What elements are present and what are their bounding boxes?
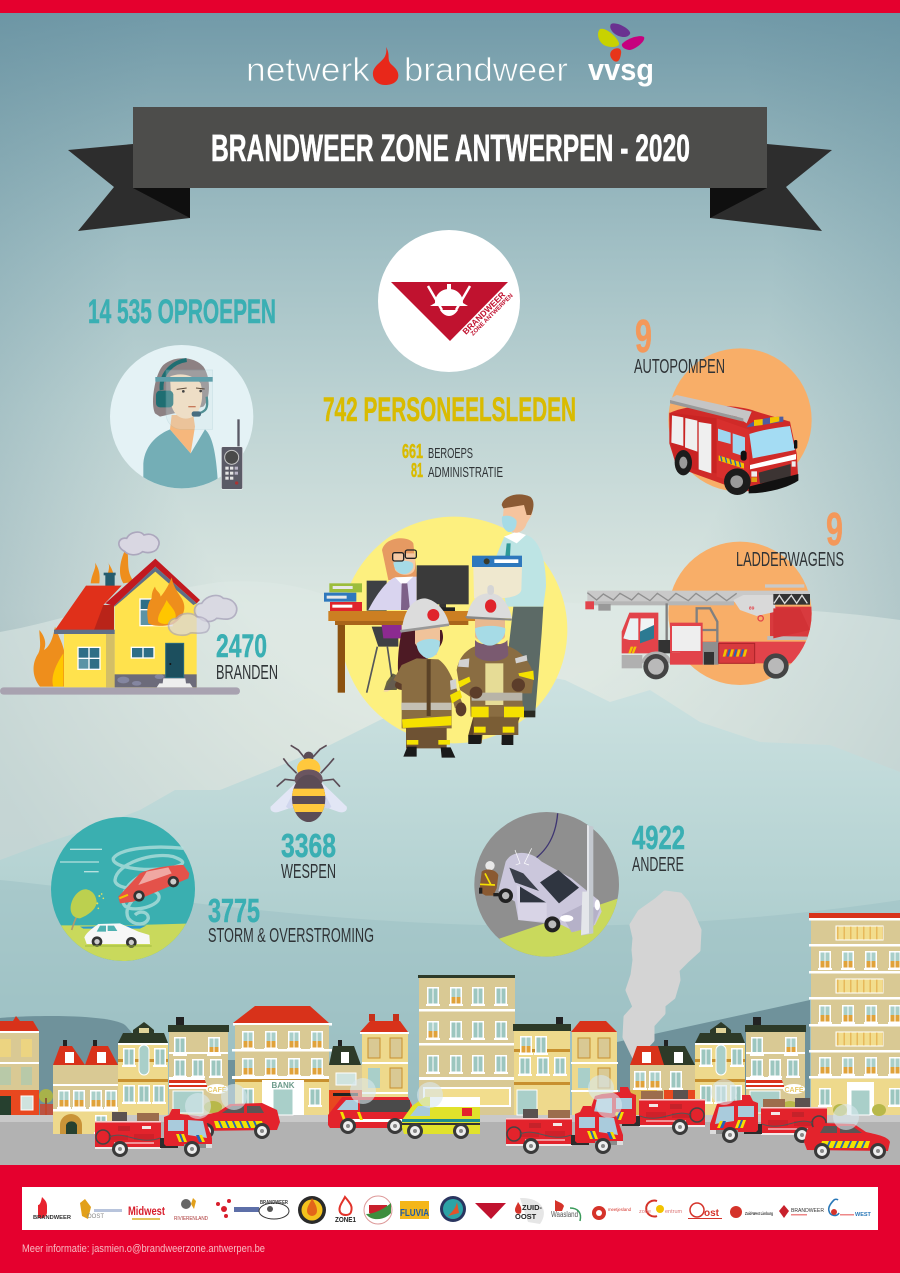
logo: netwerk brandweer xyxy=(246,47,568,88)
zone logo in white circle: BRANDWEER xyxy=(460,290,507,336)
icon: bee xyxy=(270,745,347,823)
firefighter right xyxy=(457,585,534,745)
logo: west xyxy=(829,1199,872,1218)
zone logo in white circle xyxy=(378,230,520,372)
building row left: BANK xyxy=(271,1081,295,1090)
illustration: dispatcher with radio xyxy=(110,345,253,490)
logo: zuid-west limburg xyxy=(730,1206,773,1218)
stat: branden: 2470 xyxy=(216,628,267,664)
logo: zuid-west limburg: Zuid-West Limburg xyxy=(745,1211,773,1216)
logo: fluvia xyxy=(400,1201,429,1219)
logo: west: WEST xyxy=(855,1212,872,1218)
logo: oost: ost xyxy=(704,1208,720,1219)
personnel breakdown: BEROEPS xyxy=(428,445,473,462)
illustration: ladder truck on orange circle: 89 xyxy=(749,605,755,611)
skyline: distant hills xyxy=(0,1000,810,1115)
smoke column xyxy=(625,893,699,1058)
street with buildings and vehicles xyxy=(0,913,900,1165)
logo: vvsg: vvsg xyxy=(588,52,654,87)
vehicle: fire engine left xyxy=(95,1109,212,1157)
stat: storm en overstroming: 3775 xyxy=(208,892,260,929)
logo: brandweer fort xyxy=(259,1200,289,1219)
top red bar xyxy=(0,0,900,13)
firefighter left xyxy=(383,598,466,758)
logo: netwerk brandweer: brandweer xyxy=(404,51,568,88)
logo: zone 1 xyxy=(335,1197,356,1224)
illustration: ladder truck on orange circle xyxy=(585,542,813,685)
logo: brandweer fort: BRANDWEER xyxy=(260,1200,288,1206)
stat: personeelsleden xyxy=(323,391,576,482)
stat: andere: 4922 xyxy=(632,819,685,856)
logo: zuid-oost: OOST xyxy=(515,1212,537,1221)
illustration: storm with tornado and cars xyxy=(50,817,197,967)
logo: zone centrum: zone xyxy=(639,1209,651,1215)
logo: netwerk brandweer: netwerk xyxy=(246,51,371,88)
building block middle xyxy=(418,975,618,1115)
logo: meetjesland xyxy=(592,1206,631,1220)
logo: zuid-oost xyxy=(515,1198,544,1224)
logo: zone 1: ZONE1 xyxy=(335,1217,356,1224)
logo: midwest: Midwest xyxy=(128,1204,165,1218)
partner logos strip xyxy=(22,1187,878,1230)
stat: autopompen: 9 xyxy=(635,310,652,362)
logo: brandweer westhoek xyxy=(779,1205,824,1218)
vehicle: yellow ambulance xyxy=(402,1097,480,1139)
footer band xyxy=(0,1165,900,1273)
logo: oost limburg xyxy=(216,1199,259,1218)
stat: andere: ANDERE xyxy=(632,854,684,876)
stat: andere xyxy=(632,819,685,876)
logo: zuid-oost: ZUID- xyxy=(522,1203,542,1212)
zone logo in white circle: ZONE ANTWERPEN xyxy=(470,293,515,337)
title banner xyxy=(68,107,832,231)
logo: yellow seal xyxy=(298,1196,326,1224)
logo: waasland xyxy=(551,1200,581,1221)
vehicle: fire engine facing left front xyxy=(710,1095,827,1143)
illustration: staff and firefighters on yellow circle xyxy=(324,494,567,758)
logo: brandweer xyxy=(33,1197,71,1221)
stat: autopompen xyxy=(634,310,725,378)
personnel breakdown: ADMINISTRATIE xyxy=(428,464,503,481)
stat: personeelsleden: 742 PERSONEELSLEDEN xyxy=(323,391,576,429)
stat: ladderwagens xyxy=(736,503,844,571)
stat: autopompen: AUTOPOMPEN xyxy=(634,356,725,378)
vehicle: fire engine facing left rear xyxy=(588,1087,705,1135)
contact info: Meer informatie: jasmien.o@brandweerzone.antwerpen.be xyxy=(22,1243,265,1255)
stat: storm en overstroming xyxy=(208,892,374,947)
logo: oost xyxy=(688,1203,722,1219)
logo: zone centrum xyxy=(639,1200,683,1217)
logo: fluvia: FLUVIA xyxy=(400,1208,429,1219)
illustration: car crash into pole xyxy=(474,812,622,962)
personnel breakdown xyxy=(402,441,503,482)
stat: branden: BRANDEN xyxy=(216,662,278,684)
stat: wespen xyxy=(281,827,336,883)
tall building right xyxy=(809,913,900,1116)
stat: wespen: 3368 xyxy=(281,827,336,864)
logo: brandweer westhoek: BRANDWEER xyxy=(791,1208,824,1214)
logo: zone centrum: entrum xyxy=(665,1209,683,1215)
logo: rivierenland xyxy=(174,1198,208,1222)
building row left xyxy=(0,1006,409,1134)
stat: oproepen: 14 535 OPROEPEN xyxy=(88,293,276,331)
illustration: fire engine on orange circle xyxy=(668,348,812,495)
personnel breakdown: 661 xyxy=(402,441,423,463)
personnel breakdown: 81 xyxy=(411,460,423,482)
logo: brandweer: BRANDWEER xyxy=(33,1215,71,1221)
vehicle: fire car right xyxy=(804,1123,890,1159)
logo: waasland: Waasland xyxy=(551,1210,578,1219)
logo: teal seal xyxy=(440,1196,466,1222)
logo: hulpverleningszone oost xyxy=(80,1199,122,1220)
building row right xyxy=(630,1017,806,1115)
illustration: burning house xyxy=(0,532,240,695)
stat: ladderwagens: LADDERWAGENS xyxy=(736,549,844,571)
logo: antwerpen triangle xyxy=(475,1203,506,1219)
vehicle: fire car left xyxy=(194,1103,280,1139)
logo: red crest xyxy=(364,1196,392,1224)
stat: ladderwagens: 9 xyxy=(826,503,843,555)
vehicle: fire engine centre xyxy=(506,1106,623,1154)
logo: vvsg xyxy=(588,23,654,87)
vehicle: fire van xyxy=(328,1097,412,1134)
logo: rivierenland: RIVIERENLAND xyxy=(174,1216,208,1222)
beacon glows xyxy=(185,1075,859,1130)
logo: meetjesland: meetjesland xyxy=(608,1207,631,1212)
logo: hulpverleningszone oost: OOST xyxy=(87,1214,104,1220)
stat: storm en overstroming: STORM & OVERSTROMING xyxy=(208,925,374,947)
stat: wespen: WESPEN xyxy=(281,861,336,883)
stat: branden xyxy=(216,628,278,684)
man carrying files xyxy=(472,494,546,717)
desk, monitor, binders and woman xyxy=(324,538,475,693)
